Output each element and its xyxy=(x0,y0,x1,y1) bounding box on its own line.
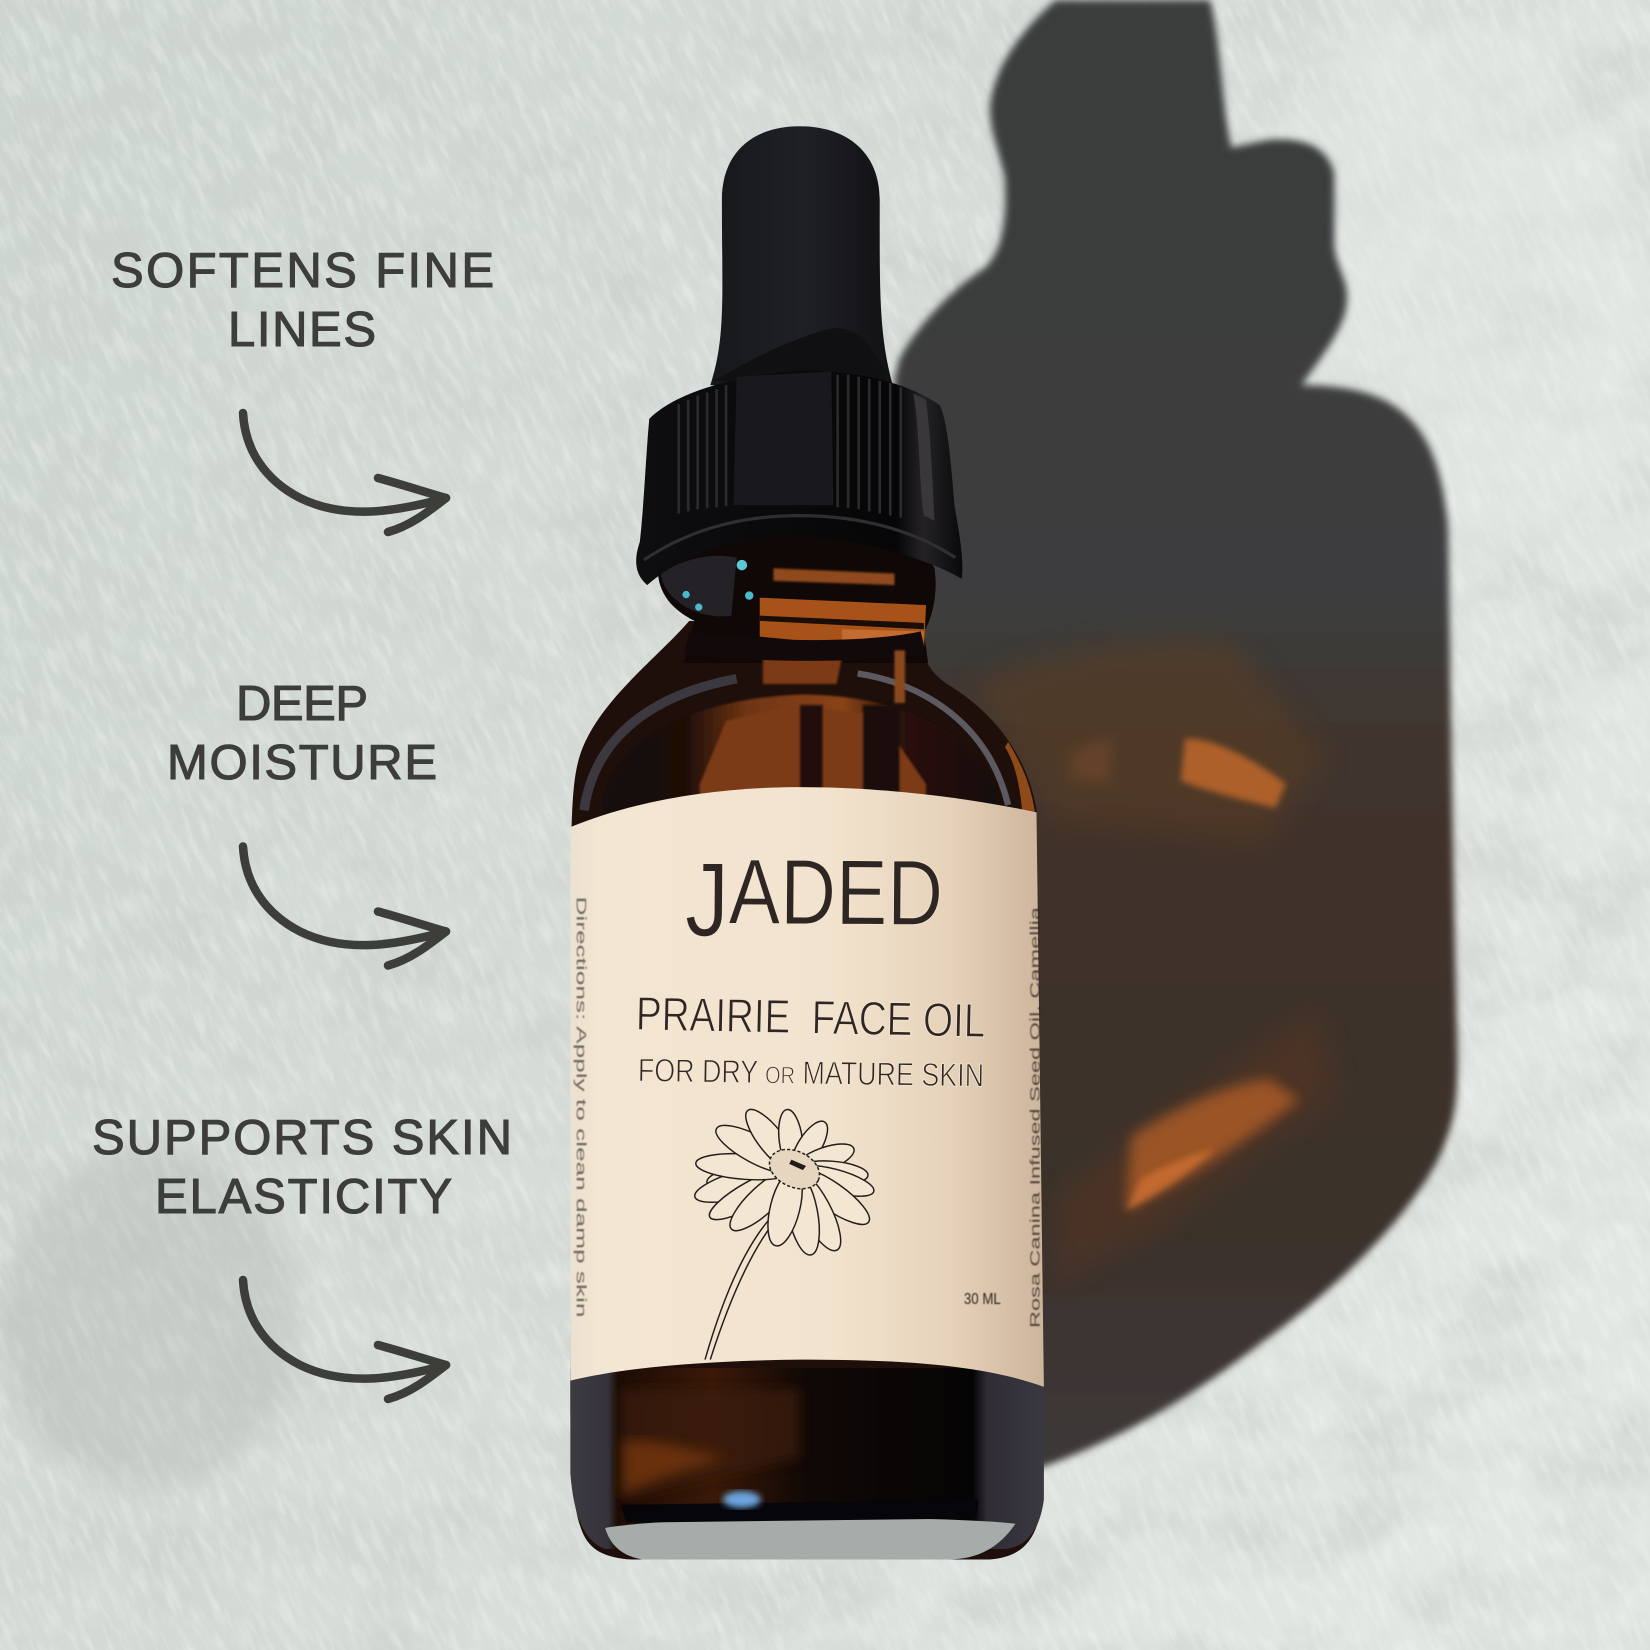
volume: 30 ML xyxy=(964,1291,1001,1308)
benefit: deep moisture: MOISTURE xyxy=(167,736,437,790)
arrow xyxy=(243,413,446,532)
benefit: supports skin elasticity xyxy=(92,1111,512,1399)
brand name: J xyxy=(685,842,729,959)
product: amber dropper bottle xyxy=(570,126,1044,1560)
shadow: warm amber glow xyxy=(973,639,1336,1284)
side text: ingredients: Rosa Canina Infused Seed Oil, Camellia xyxy=(1028,907,1044,1328)
arrow xyxy=(243,1280,446,1399)
bottle shadow xyxy=(884,0,1457,1469)
benefit: deep moisture xyxy=(167,677,446,966)
illustration: daisy xyxy=(691,1103,877,1360)
neck amber reflections xyxy=(658,533,936,684)
base of the bottle xyxy=(570,1368,1044,1560)
dropper rubber bulb xyxy=(710,126,894,391)
bottle glass body xyxy=(570,533,1044,1560)
dropper black screw collar xyxy=(636,370,962,585)
benefit: supports skin elasticity: ELASTICITY xyxy=(155,1170,452,1224)
benefit: softens fine lines xyxy=(111,244,494,532)
benefit: deep moisture: DEEP xyxy=(236,677,368,731)
benefit: softens fine lines: LINES xyxy=(228,303,376,357)
amber inner reflection xyxy=(700,650,926,805)
product descriptor: FOR DRY OR MATURE SKIN xyxy=(638,1051,984,1094)
arrow xyxy=(243,846,446,966)
product name: PRAIRIE FACE OIL xyxy=(635,988,986,1048)
benefit: supports skin elasticity: SUPPORTS SKIN xyxy=(92,1111,512,1165)
label: cream paper wrap xyxy=(570,787,1044,1387)
benefit: softens fine lines: SOFTENS FINE xyxy=(111,244,494,298)
side text: directions: Directions: Apply to clean damp skin xyxy=(573,897,589,1317)
brand name: ADED xyxy=(729,839,943,945)
